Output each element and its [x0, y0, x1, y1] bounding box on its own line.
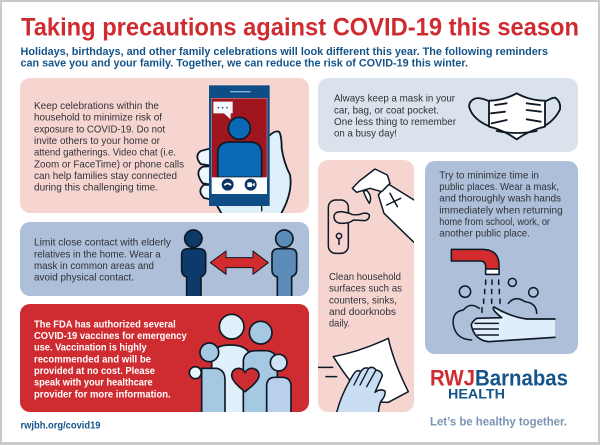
panel: minimize time in public places: [425, 161, 578, 354]
icon: two people apart with arrow: [182, 230, 297, 298]
text: keep a mask: [334, 94, 457, 140]
icon: hand holding phone on video call: [197, 85, 291, 217]
text: minimize time in public: and thoroughly wash hands: [439, 194, 561, 205]
text: vaccine information: provider for more information.: [34, 389, 171, 400]
text: clean surfaces: [329, 272, 402, 330]
text: vaccine information: recommended and will be: [34, 354, 151, 365]
text: keep a mask: car, bag, or coat pocket.: [334, 105, 439, 116]
text: household celebrations: Keep celebrations within the: [34, 101, 159, 112]
logo: RWJBarnabas Health: [430, 366, 568, 402]
text: minimize time in public: home from school, work, or: [439, 217, 550, 228]
text: household celebrations: exposure to COVID-19. Do not: [34, 124, 165, 135]
panel: clean surfaces: [318, 160, 417, 415]
text: household celebrations: attend gatherings. Video chat (i.e.: [34, 148, 176, 159]
text: keep a mask: on a busy day!: [334, 129, 397, 140]
text: minimize time in public: another public place.: [439, 229, 530, 240]
text: minimize time in public: immediately when returning: [439, 205, 563, 216]
intro text: can save you and your family. Together, we can reduce the risk of COVID-19 this winter.: [20, 58, 468, 70]
text: clean surfaces: counters, sinks,: [329, 295, 397, 306]
text: vaccine information: provided at no cost. Please: [34, 366, 155, 377]
logo: RWJBarnabas Health: RWJ: [430, 366, 475, 391]
title: Taking precautions against COVID-19 this season: [21, 14, 579, 42]
text: vaccine information: use. Vaccination is highly: [34, 343, 147, 354]
text: minimize time in public: [439, 170, 563, 240]
text: clean surfaces: surfaces such as: [329, 284, 402, 295]
icon: face mask: [469, 93, 560, 139]
icons: door handle, spray bottle, gloved hand with cloth: [318, 169, 417, 415]
text: clean surfaces: and doorknobs: [329, 307, 396, 318]
text: household celebrations: can help families stay connected: [34, 171, 177, 182]
text: keep a mask: Always keep a mask in your: [334, 94, 456, 105]
logo: RWJBarnabas Health: Barnabas: [475, 366, 568, 391]
text: vaccine information: speak with your healthcare: [34, 378, 153, 389]
text: vaccine information: The FDA has authorized several: [34, 319, 176, 330]
text: household celebrations: Zoom or FaceTime) or phone calls: [34, 159, 184, 170]
text: household celebrations: invite others to your home or: [34, 136, 161, 147]
icon: hands washing under faucet: [451, 249, 555, 342]
panel: keep celebrations within household: [20, 78, 309, 217]
tagline: Let’s be healthy together.: [430, 417, 567, 429]
text: minimize time in public: Try to minimize time in: [439, 170, 539, 181]
text: minimize time in public: public places. Wear a mask,: [439, 182, 559, 193]
logo: RWJBarnabas Health: HEALTH: [448, 386, 505, 402]
text: limit close contact: Limit close contact with elderly: [34, 238, 172, 249]
intro text: [20, 46, 548, 70]
text: household celebrations: [34, 101, 184, 194]
text: keep a mask: One less thing to remember: [334, 117, 457, 128]
icon: family with heart: [189, 314, 291, 415]
panel: vaccine information: [20, 304, 309, 415]
intro text: Holidays, birthdays, and other family celebrations will look different this year. The following reminders: [20, 46, 548, 58]
text: clean surfaces: daily.: [329, 319, 350, 330]
link: website: rwjbh.org/covid19: [20, 420, 101, 432]
panel: keep a mask: [318, 78, 578, 152]
text: vaccine information: COVID-19 vaccines for emergency: [34, 331, 187, 342]
panel: limit close contact: [20, 222, 309, 298]
text: limit close contact: avoid physical contact.: [34, 273, 134, 284]
text: vaccine information: [34, 319, 187, 400]
text: household celebrations: household to minimize risk of: [34, 113, 162, 124]
text: limit close contact: mask in common areas and: [34, 261, 154, 272]
text: clean surfaces: Clean household: [329, 272, 401, 283]
text: limit close contact: [34, 238, 172, 284]
text: limit close contact: relatives in the home. Wear a: [34, 249, 161, 260]
text: household celebrations: during this challenging time.: [34, 183, 158, 194]
